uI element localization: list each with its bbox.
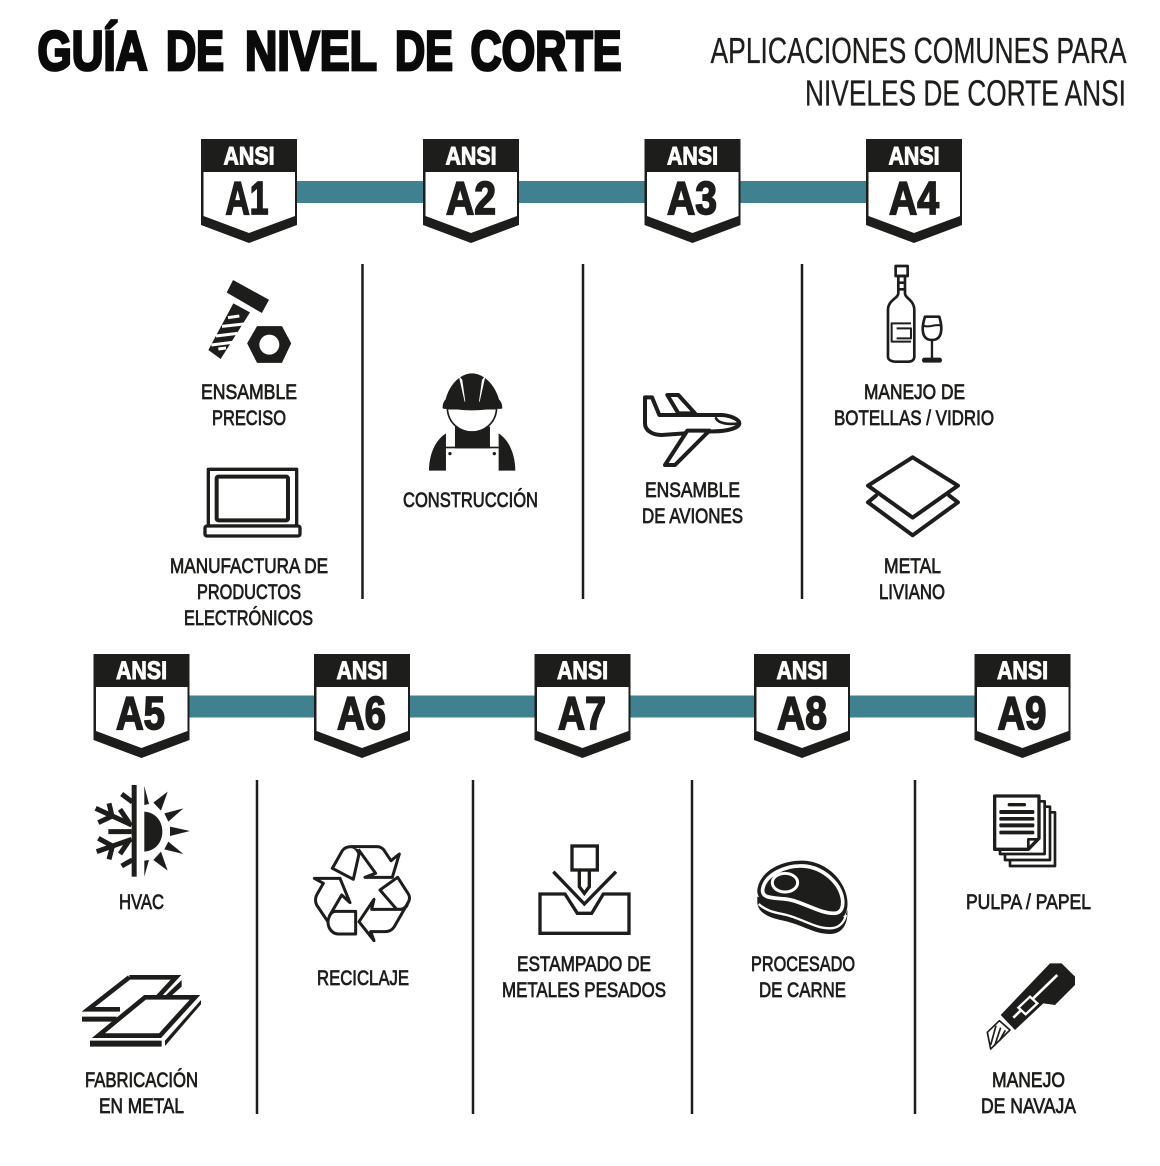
icon: utility knife xyxy=(987,963,1075,1049)
label: manejo de navaja xyxy=(981,1069,1076,1118)
badge: A9: A9 xyxy=(998,687,1046,739)
badge: A5 xyxy=(94,654,190,758)
badge: A8 xyxy=(754,654,850,758)
icon: HVAC snow and sun xyxy=(96,785,190,877)
label: reciclaje: RECICLAJE xyxy=(317,967,409,990)
icon: airplane xyxy=(645,395,739,465)
label: manufactura de productos electrónicos: PRODUCTOS xyxy=(197,581,301,604)
badge: A4: ANSI xyxy=(888,142,940,170)
badge: A2: A2 xyxy=(446,172,496,224)
icon: metal sheets fabrication xyxy=(82,977,201,1047)
badge: A1: ANSI xyxy=(224,142,274,170)
badge: A2: ANSI xyxy=(446,142,496,170)
label: ensamble preciso: PRECISO xyxy=(212,407,286,430)
label: ensamble de aviones: DE AVIONES xyxy=(642,505,743,528)
icon: metal stamping press xyxy=(540,846,629,933)
title: DE xyxy=(166,19,224,82)
title xyxy=(38,19,622,82)
badge: A3: A3 xyxy=(667,172,717,224)
badge: A4: A4 xyxy=(889,172,939,224)
label: manejo de botellas / vidrio xyxy=(834,381,994,430)
badge: A7: ANSI xyxy=(557,657,608,685)
badge: A8: ANSI xyxy=(776,657,828,685)
label: ensamble de aviones xyxy=(642,479,743,528)
badge: A2 xyxy=(423,139,519,243)
badge: A7 xyxy=(534,654,630,758)
label: pulpa / papel: PULPA / PAPEL xyxy=(966,891,1091,914)
label: manejo de navaja: MANEJO xyxy=(992,1069,1065,1092)
label: fabricación en metal: FABRICACIÓN xyxy=(85,1069,198,1092)
label: ensamble de aviones: ENSAMBLE xyxy=(645,479,740,502)
label: manufactura de productos electrónicos: ELECTRÓNICOS xyxy=(184,607,313,630)
label: fabricación en metal xyxy=(85,1069,198,1118)
badge: A5: ANSI xyxy=(116,657,167,685)
label: metal liviano xyxy=(879,555,945,604)
badge: A4 xyxy=(866,139,962,243)
timeline bar: A1 to A4 xyxy=(290,181,875,203)
label: manufactura de productos electrónicos xyxy=(170,555,328,630)
label: metal liviano: METAL xyxy=(884,555,941,578)
icon: bolt and nut xyxy=(208,281,291,362)
icon: laptop xyxy=(205,469,300,536)
label: procesado de carne: DE CARNE xyxy=(759,979,846,1002)
badge: A3 xyxy=(644,139,740,243)
label: manejo de navaja: DE NAVAJA xyxy=(981,1095,1076,1118)
label: fabricación en metal: EN METAL xyxy=(99,1095,184,1118)
badge: A6: A6 xyxy=(337,687,386,739)
icon: recycling arrows xyxy=(314,847,410,941)
title: NIVEL xyxy=(245,19,377,82)
label: metal liviano: LIVIANO xyxy=(879,581,945,604)
badge: A9: ANSI xyxy=(997,657,1048,685)
badge: A6 xyxy=(314,654,410,758)
badge: A8: A8 xyxy=(777,687,827,739)
label: estampado de metales pesados: METALES PESADOS xyxy=(502,979,666,1002)
label: construcción: CONSTRUCCIÓN xyxy=(403,489,538,512)
badge: A5: A5 xyxy=(116,687,165,739)
label: estampado de metales pesados xyxy=(502,953,666,1002)
label: procesado de carne xyxy=(751,953,855,1002)
label: estampado de metales pesados: ESTAMPADO DE xyxy=(517,953,651,976)
label: HVAC: HVAC xyxy=(119,891,164,914)
label: ensamble preciso: ENSAMBLE xyxy=(201,381,297,404)
title: GUÍA xyxy=(38,19,148,82)
label: manejo de botellas / vidrio: BOTELLAS / VIDRIO xyxy=(834,407,994,430)
badge: A7: A7 xyxy=(558,687,606,739)
icon: meat steak xyxy=(757,861,847,934)
badge: A3: ANSI xyxy=(667,142,718,170)
badge: A6: ANSI xyxy=(336,657,388,685)
label: procesado de carne: PROCESADO xyxy=(751,953,855,976)
badge: A1: A1 xyxy=(226,172,268,224)
label: manejo de botellas / vidrio: MANEJO DE xyxy=(864,381,965,404)
subtitle xyxy=(710,30,1126,114)
label: ensamble preciso xyxy=(201,381,297,430)
title: DE xyxy=(395,19,453,82)
icon: bottle and glass xyxy=(888,266,941,362)
icon: construction worker xyxy=(429,373,515,471)
timeline bar: A5 to A9 xyxy=(180,696,980,718)
badge: A9 xyxy=(974,654,1070,758)
icon: stacked paper xyxy=(995,796,1055,866)
title: CORTE xyxy=(470,19,622,82)
label: manufactura de productos electrónicos: MANUFACTURA DE xyxy=(170,555,328,578)
badge: A1 xyxy=(201,139,297,243)
icon: light metal sheets xyxy=(868,457,958,535)
